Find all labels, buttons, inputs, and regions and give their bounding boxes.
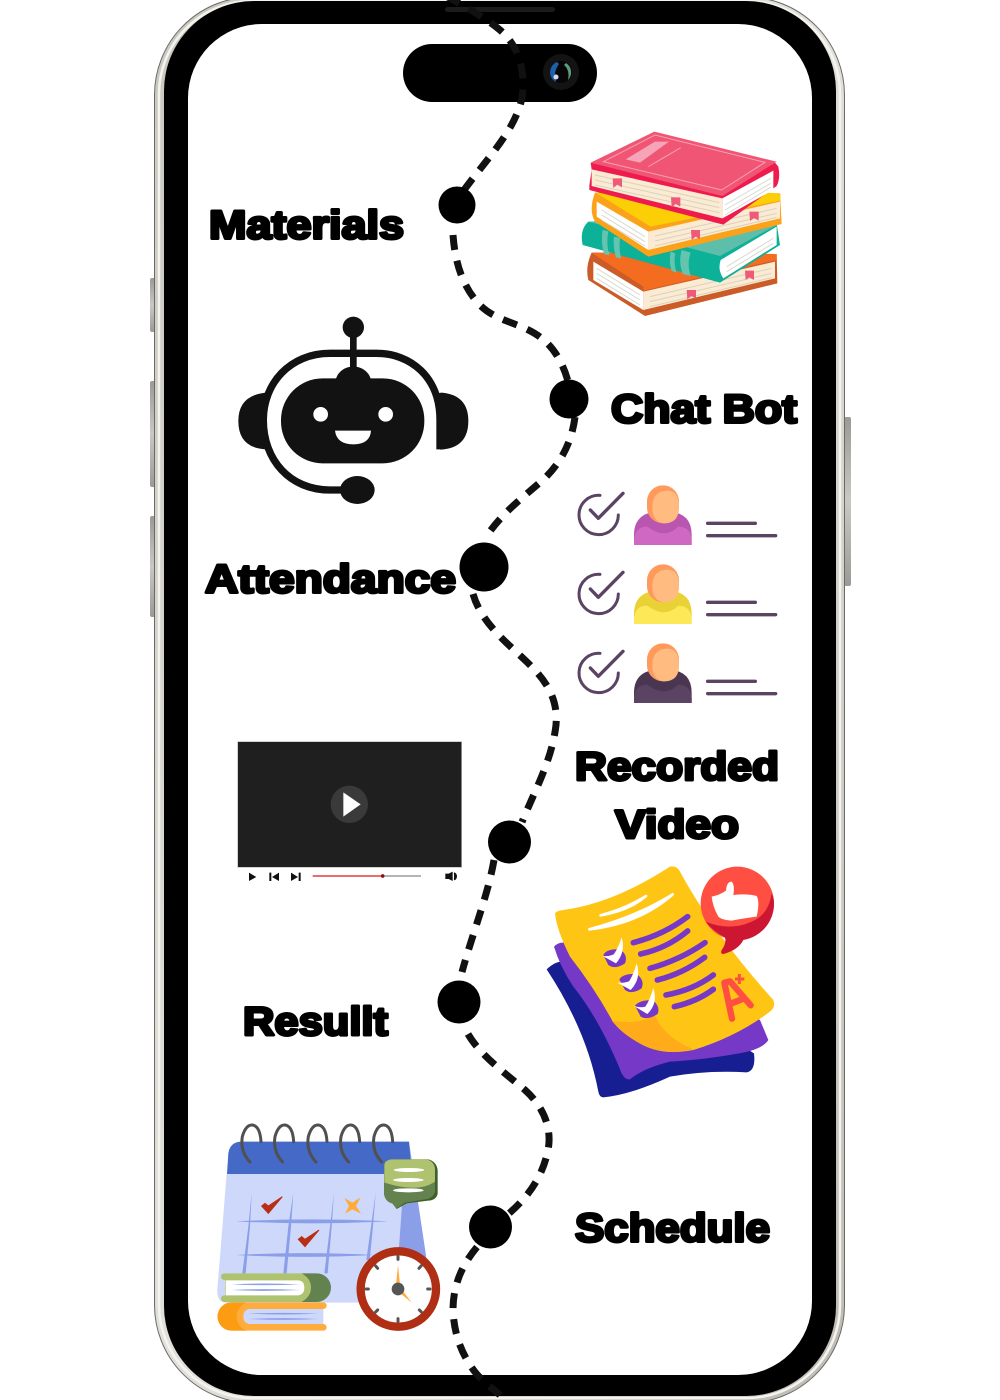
icon: attendance list <box>579 485 776 703</box>
notch with camera <box>403 44 597 102</box>
row 2: student checked in <box>579 564 776 624</box>
dashed timeline path <box>446 0 575 1395</box>
heading: Attendance: Attendance <box>205 558 456 602</box>
heading: Recorded: Recorded <box>575 745 779 789</box>
row 1: student checked in <box>579 485 776 545</box>
heading: Schedule: Schedule <box>575 1206 770 1250</box>
timeline dot: recorded video <box>488 820 531 864</box>
heading: Resullt: Resullt <box>243 1000 388 1044</box>
heading: Materials: Materials <box>209 204 404 248</box>
heading: Video: Video <box>615 803 739 847</box>
heading: Chat Bot: Chat Bot <box>611 388 797 432</box>
phone frame <box>150 0 851 1400</box>
icon: stack of books <box>582 132 782 316</box>
timeline dot: chat bot <box>550 380 588 418</box>
timeline dot: attendance <box>460 542 508 592</box>
timeline dot: materials <box>438 186 476 224</box>
timeline dot: result <box>438 980 480 1024</box>
icon: robot with headset <box>238 317 468 504</box>
row 3: student checked in <box>579 643 776 703</box>
timeline dot: schedule <box>469 1206 512 1248</box>
icon: video player <box>238 742 462 881</box>
icon: calendar with clock and books <box>217 1125 438 1331</box>
icon: graded papers <box>547 866 774 1097</box>
